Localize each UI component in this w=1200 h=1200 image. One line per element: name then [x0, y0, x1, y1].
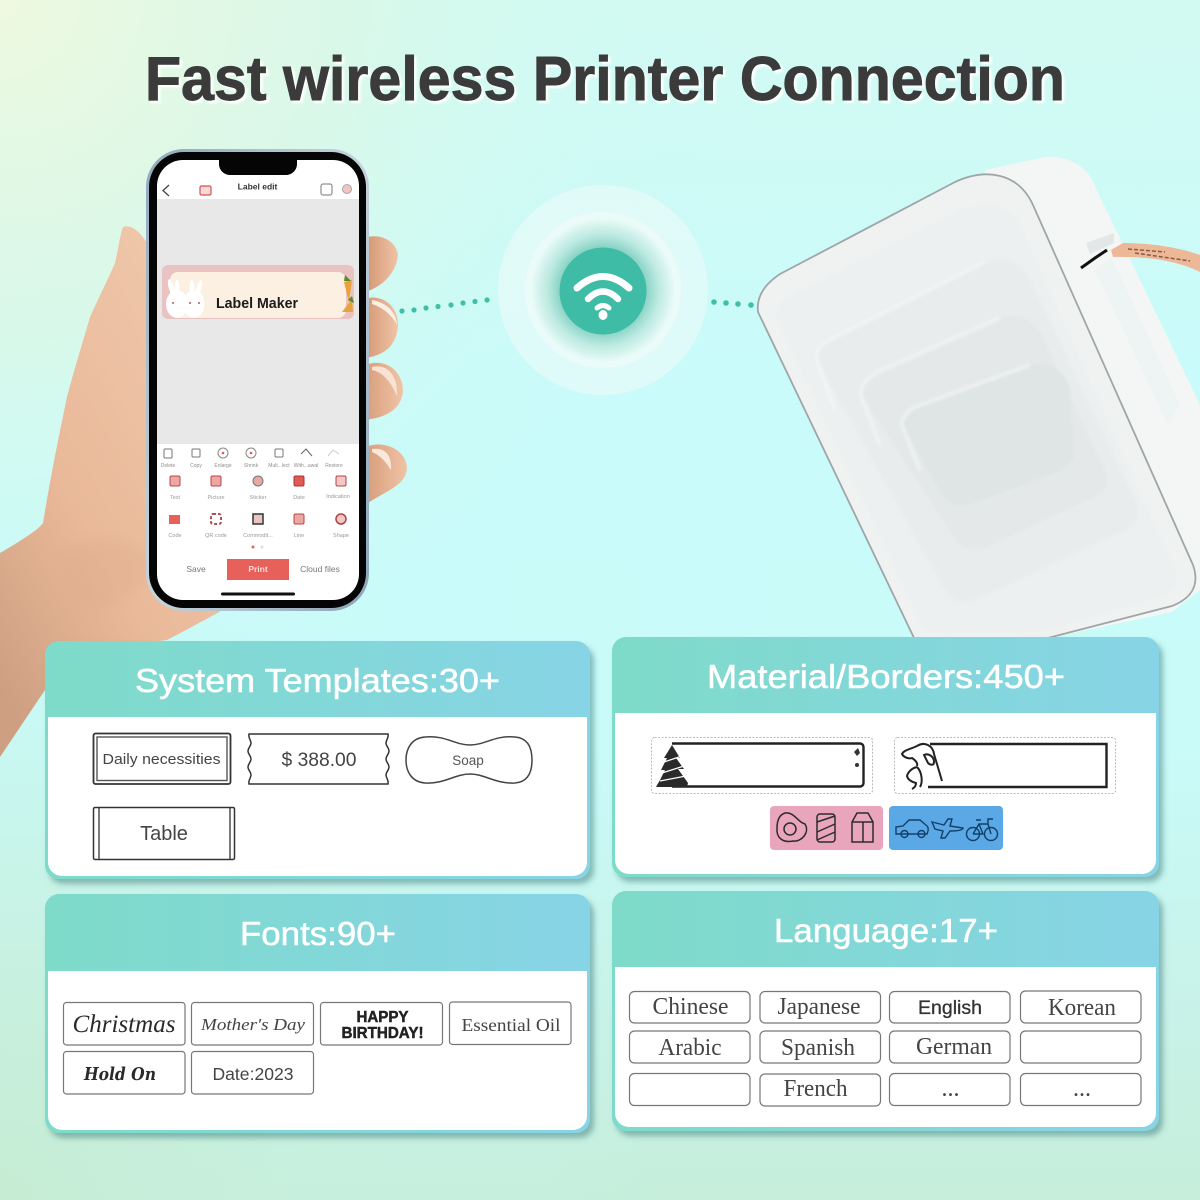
- printer slot and tape: [1081, 233, 1200, 272]
- tool grid: QR code: [205, 533, 227, 539]
- icon: wifi badge: [498, 185, 708, 395]
- tool grid: Commodit...: [243, 533, 273, 539]
- language grid: ...: [942, 1076, 960, 1102]
- font sample: essential oil: [450, 1002, 571, 1044]
- font sample: happy birthday: [320, 1002, 442, 1045]
- template: daily necessities: [94, 734, 230, 784]
- font sample: christmas: [64, 1002, 185, 1045]
- font sample: essential oil: Essential Oil: [462, 1015, 560, 1035]
- language grid: ...: [1073, 1076, 1091, 1102]
- finger 1: [368, 236, 398, 291]
- tool grid: Date: [293, 495, 305, 501]
- heading: Language:17+: [774, 912, 998, 949]
- icon group: food stickers: [770, 806, 883, 850]
- tool grid: Picture: [207, 495, 225, 501]
- finger 4: [362, 445, 407, 503]
- app header: Label edit: [238, 182, 277, 192]
- language grid: Korean: [1048, 995, 1116, 1021]
- font sample: date: [192, 1052, 314, 1094]
- label preview: Label Maker: [216, 295, 298, 312]
- finger 2: [366, 297, 398, 358]
- printer front face: [758, 174, 1195, 640]
- template: soap: Soap: [452, 753, 484, 768]
- toolbar: Enlarge: [214, 463, 232, 469]
- toolbar: Delete: [161, 463, 175, 469]
- panel: language: [612, 891, 1159, 1131]
- template: table: [94, 808, 234, 860]
- phone frame: [146, 149, 369, 611]
- hand holding phone: [0, 226, 407, 757]
- heading: Material/Borders:450+: [707, 658, 1065, 695]
- language grid: Japanese: [778, 994, 860, 1020]
- toolbar: Restore: [325, 463, 343, 469]
- app header: [163, 182, 352, 196]
- font sample: mother's day: [192, 1002, 314, 1045]
- toolbar: With...awal: [294, 463, 318, 469]
- language grid: English: [918, 998, 982, 1019]
- font sample: mother's day: Mother's Day: [200, 1015, 306, 1034]
- printer: [758, 157, 1200, 640]
- title: Fast wireless Printer Connection: [145, 45, 1065, 114]
- panel: material and borders: [612, 637, 1159, 877]
- language grid: Chinese: [652, 994, 728, 1020]
- bottom actions: Cloud files: [300, 564, 340, 574]
- toolbar: [161, 448, 343, 469]
- heading: System Templates:30+: [135, 662, 500, 699]
- tool grid: Code: [168, 533, 182, 539]
- phone screen: [157, 160, 359, 600]
- language grid: [630, 991, 1141, 1106]
- language grid: French: [784, 1076, 848, 1102]
- font sample: happy birthday: HAPPY: [356, 1009, 409, 1026]
- font sample: hold on: [64, 1052, 185, 1094]
- border sample: christmas tree: [652, 738, 872, 794]
- bunnies: [166, 279, 204, 318]
- tool grid: [168, 476, 350, 548]
- dotted connector right: [711, 299, 754, 308]
- toolbar: Copy: [190, 463, 202, 469]
- tool grid: Sticker: [250, 495, 267, 501]
- canvas area: [157, 199, 359, 444]
- font sample: happy birthday: BIRTHDAY!: [342, 1025, 424, 1042]
- font sample: christmas: Christmas: [72, 1011, 176, 1038]
- template: price: [248, 734, 389, 784]
- bottom actions: Save: [186, 564, 206, 574]
- bottom actions: [186, 559, 340, 596]
- printer back body: [985, 157, 1200, 640]
- language grid: Spanish: [781, 1035, 855, 1061]
- panel: fonts: [45, 894, 590, 1133]
- panel: system templates: [45, 641, 590, 879]
- font sample: date: Date:2023: [212, 1064, 294, 1084]
- template: price: $ 388.00: [282, 750, 356, 771]
- tool grid: Shape: [333, 533, 349, 539]
- tool grid: Text: [170, 495, 181, 501]
- printer embossed steps: [776, 204, 1177, 632]
- font sample: hold on: Hold On: [83, 1064, 156, 1085]
- carrots: [342, 275, 354, 312]
- finger 3: [361, 363, 403, 420]
- language grid: German: [916, 1034, 992, 1060]
- toolbar: Mult...lect: [268, 463, 290, 469]
- label preview: [162, 265, 354, 319]
- tool grid: Indication: [326, 494, 350, 500]
- notch: [219, 158, 297, 175]
- phone: [146, 149, 369, 611]
- bottom actions: Print: [248, 564, 268, 574]
- heading: Fonts:90+: [240, 915, 396, 952]
- border sample: dog and cat: [894, 738, 1116, 794]
- tool grid: Line: [294, 533, 304, 539]
- toolbar: Shrink: [244, 463, 259, 469]
- template: table: Table: [140, 823, 188, 845]
- dotted connector left: [399, 297, 490, 314]
- language grid: Arabic: [658, 1035, 722, 1061]
- template: soap: [406, 737, 532, 783]
- icon group: transport stickers: [889, 806, 1003, 850]
- template: daily necessities: Daily necessities: [102, 752, 220, 768]
